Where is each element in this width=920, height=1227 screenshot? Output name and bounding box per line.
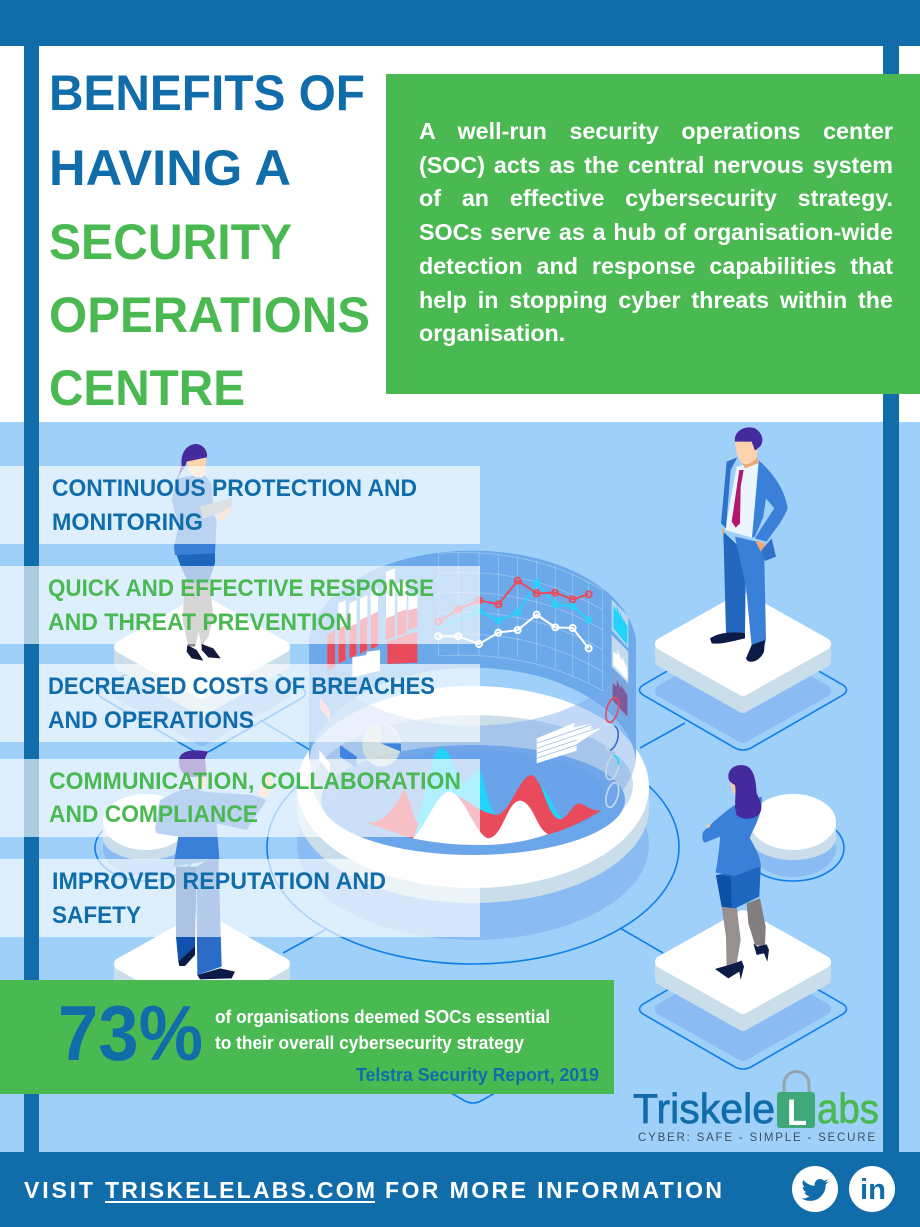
title: BENEFITS OF bbox=[49, 65, 365, 121]
statistic description bbox=[215, 1007, 550, 1053]
benefit 4 bbox=[0, 759, 480, 837]
side charts bbox=[612, 599, 628, 719]
benefit 1: MONITORING bbox=[52, 509, 203, 536]
area waves bbox=[363, 748, 602, 845]
disc platform right bbox=[742, 794, 844, 881]
intro paragraph: of an effective cybersecurity strategy. bbox=[419, 185, 893, 211]
source: Telstra Security Report, 2019 bbox=[356, 1065, 599, 1085]
statistic description: of organisations deemed SOCs essential bbox=[215, 1007, 550, 1027]
line chart bbox=[435, 578, 592, 651]
person: man pointing bbox=[155, 750, 273, 979]
footer call to action: FOR MORE INFORMATION bbox=[385, 1177, 722, 1203]
platform outline: bottom centre bbox=[370, 983, 576, 1103]
statistic banner bbox=[0, 980, 614, 1094]
title: HAVING A bbox=[49, 140, 291, 196]
disc platform left bbox=[95, 794, 197, 881]
small wall shards bbox=[319, 697, 357, 773]
back wall bbox=[309, 551, 636, 760]
platform: bottom right bbox=[640, 916, 846, 1069]
network lines bbox=[260, 720, 685, 964]
platform: bottom left bbox=[98, 918, 306, 1070]
pie chart bbox=[362, 723, 401, 767]
logo: abs bbox=[817, 1085, 879, 1132]
benefit 4: AND COMPLIANCE bbox=[49, 801, 258, 828]
logo bbox=[633, 1072, 879, 1144]
left bar segments over benefits bbox=[24, 466, 39, 937]
benefit 1: CONTINUOUS PROTECTION AND bbox=[52, 475, 417, 502]
benefit 2: QUICK AND EFFECTIVE RESPONSE bbox=[48, 575, 434, 602]
intro paragraph: SOCs serve as a hub of organisation-wide bbox=[419, 219, 893, 245]
front glass wall bbox=[309, 640, 636, 846]
left vertical bar bbox=[24, 46, 39, 1152]
platform: top right bbox=[640, 598, 846, 750]
red area chart bbox=[387, 632, 417, 664]
title: CENTRE bbox=[49, 360, 245, 416]
benefit 3: DECREASED COSTS OF BREACHES bbox=[48, 673, 435, 700]
platform: top left bbox=[98, 601, 306, 753]
folder card bbox=[352, 650, 380, 677]
bar chart on wall bbox=[327, 568, 417, 671]
text lines panel bbox=[537, 723, 601, 763]
intro paragraph: (SOC) acts as the central nervous system bbox=[419, 152, 893, 178]
central hologram bbox=[297, 551, 649, 940]
title: OPERATIONS bbox=[49, 287, 370, 343]
intro paragraph: detection and response capabilities that bbox=[419, 253, 893, 279]
wall grid bbox=[438, 552, 603, 691]
benefit 2 bbox=[0, 566, 480, 644]
person: woman with tablet bbox=[172, 444, 233, 661]
logo: Triskele bbox=[633, 1085, 775, 1132]
benefit 1 bbox=[0, 466, 480, 544]
platform base bbox=[297, 686, 649, 940]
logo: CYBER: SAFE - SIMPLE - SECURE bbox=[638, 1132, 875, 1144]
benefit 5: IMPROVED REPUTATION AND bbox=[52, 868, 386, 895]
person: woman from behind bbox=[702, 765, 769, 980]
footer call to action: VISIT bbox=[24, 1177, 93, 1203]
footer bar bbox=[0, 1152, 920, 1227]
intro paragraph: organisation. bbox=[419, 320, 565, 346]
icon: twitter bbox=[792, 1166, 838, 1212]
title: SECURITY bbox=[49, 214, 292, 270]
benefit 5: SAFETY bbox=[52, 902, 141, 929]
ring gauges bbox=[604, 696, 621, 809]
icon: padlock: L bbox=[787, 1092, 807, 1133]
benefit 3 bbox=[0, 664, 480, 742]
intro paragraph: A well-run security operations center bbox=[419, 118, 893, 144]
icon: padlock bbox=[777, 1072, 815, 1133]
benefit 3: AND OPERATIONS bbox=[48, 707, 254, 734]
icon: linkedin bbox=[849, 1166, 895, 1212]
statistic number: 73% bbox=[58, 989, 203, 1077]
statistic description: to their overall cybersecurity strategy bbox=[215, 1033, 524, 1053]
icon: linkedin: in bbox=[860, 1174, 886, 1206]
benefit 2: AND THREAT PREVENTION bbox=[48, 609, 352, 636]
sky background panel bbox=[0, 422, 920, 1152]
right vertical bar bbox=[883, 46, 899, 1152]
intro panel background bbox=[386, 74, 920, 394]
benefit 4: COMMUNICATION, COLLABORATION bbox=[49, 768, 461, 795]
benefit 5 bbox=[0, 859, 480, 937]
title bbox=[49, 65, 370, 416]
intro paragraph bbox=[419, 118, 893, 346]
person: man in suit bbox=[710, 427, 788, 662]
intro paragraph: help in stopping cyber threats within the bbox=[419, 287, 893, 313]
footer call to action bbox=[24, 1177, 722, 1203]
footer call to action: TRISKELELABS.COM bbox=[105, 1177, 375, 1203]
header bar bbox=[0, 0, 920, 46]
